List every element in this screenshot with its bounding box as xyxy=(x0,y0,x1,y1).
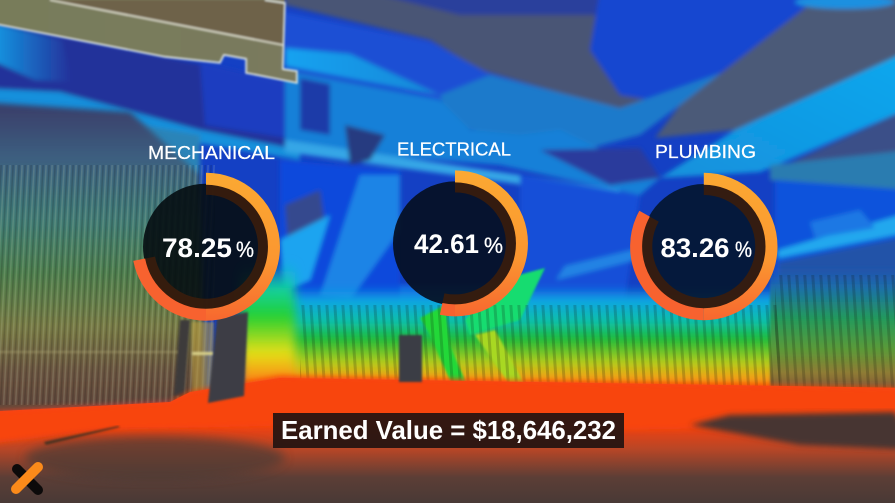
inner progress shadow xyxy=(443,187,511,300)
dark disc xyxy=(143,184,269,310)
label: electrical: ELECTRICAL xyxy=(397,138,511,160)
gauge: mechanical xyxy=(139,142,275,315)
value: 42.61 xyxy=(414,229,479,259)
value: 83.26 xyxy=(660,233,730,263)
inner progress shadow xyxy=(150,189,264,304)
beam section outlined in white xyxy=(0,0,297,83)
caption: earned value: Earned Value = $18,646,232 xyxy=(281,415,616,445)
dark disc xyxy=(393,181,517,305)
gauge: plumbing xyxy=(636,141,772,314)
percent sign: % xyxy=(236,237,254,262)
door xyxy=(399,335,422,382)
wall stripes xyxy=(0,165,215,405)
heat gradient near mechanical gauge xyxy=(240,262,295,392)
gauge: electrical xyxy=(393,138,522,310)
floor xyxy=(0,378,895,503)
window frames and posts xyxy=(0,320,214,396)
label: plumbing: PLUMBING xyxy=(655,141,756,162)
dark disc xyxy=(641,184,766,309)
heat gradient band xyxy=(275,285,785,393)
progress arc xyxy=(441,176,522,310)
percent sign: % xyxy=(484,233,503,258)
inner progress shadow xyxy=(647,190,761,304)
left wall xyxy=(0,102,205,414)
progress arc xyxy=(636,179,772,314)
progress arc xyxy=(139,179,274,315)
pillar xyxy=(208,312,248,403)
label: mechanical: MECHANICAL xyxy=(148,142,275,163)
logo xyxy=(16,467,38,490)
percent sign: % xyxy=(735,237,752,262)
right wall xyxy=(770,265,895,393)
green pipes under electrical gauge xyxy=(420,268,545,392)
value: 78.25 xyxy=(162,233,232,263)
